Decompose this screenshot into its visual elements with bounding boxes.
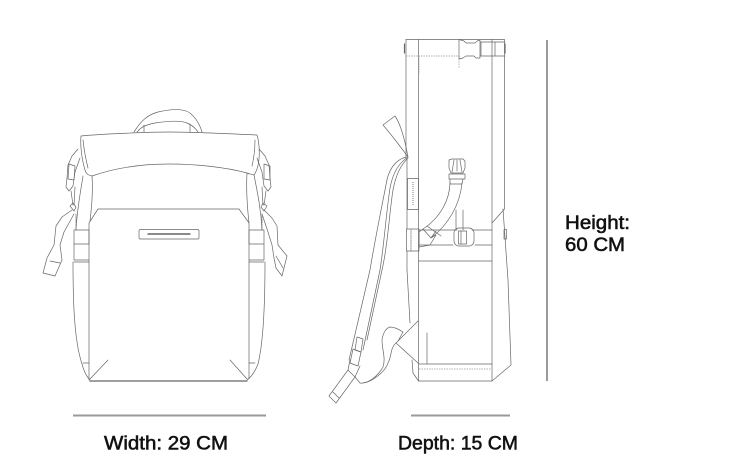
logo label xyxy=(408,178,418,210)
main body outline xyxy=(404,40,511,381)
width label: Width: 29 CM xyxy=(104,434,228,454)
shoulder strap xyxy=(349,157,408,360)
backpack body and front panel xyxy=(76,173,262,381)
side pockets and webbing xyxy=(73,214,265,380)
roll-top flap xyxy=(81,132,259,176)
height measure line xyxy=(546,40,548,381)
height label: Height: xyxy=(565,213,630,234)
compression strap and slider xyxy=(406,228,506,251)
shoulder strap buckle xyxy=(348,337,363,377)
depth measure line xyxy=(411,414,510,416)
left side strap and buckle xyxy=(43,149,80,276)
top handle xyxy=(134,110,202,132)
lower strap anchor xyxy=(355,321,418,383)
front view backpack xyxy=(43,110,287,381)
roll-top buckle xyxy=(459,40,505,59)
stitching lines xyxy=(406,56,492,369)
width measure line xyxy=(73,414,266,416)
side strap and buckle xyxy=(419,159,465,247)
depth label: Depth: 15 CM xyxy=(398,434,518,454)
height label: 60 CM xyxy=(565,235,625,256)
front pocket zip slot xyxy=(139,230,199,239)
height label xyxy=(565,213,630,256)
lower strap end xyxy=(329,370,355,403)
shoulder strap top tab xyxy=(383,116,408,157)
right side strap and buckle xyxy=(257,149,287,276)
side view backpack xyxy=(329,40,511,403)
